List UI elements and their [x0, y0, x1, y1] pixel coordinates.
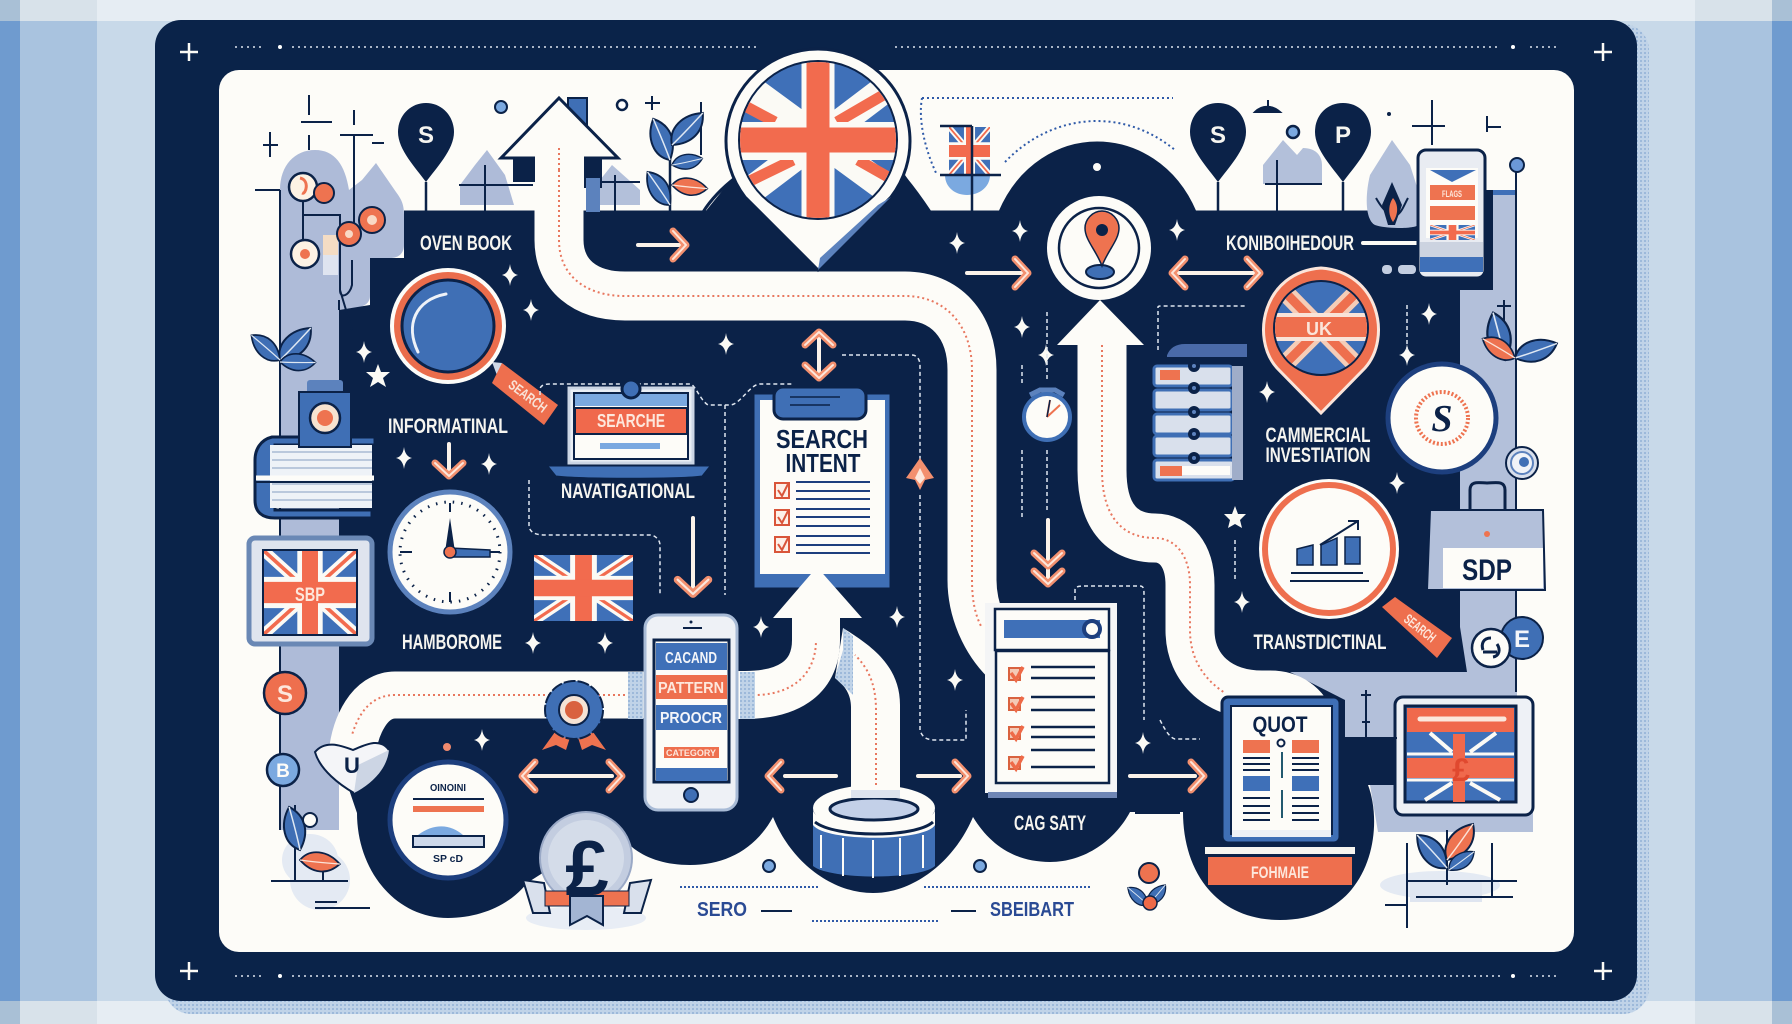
label: commercial investigation: INVESTIATION [1266, 444, 1370, 467]
book with camera [255, 380, 375, 518]
bottom left circle: product: SP cD [433, 854, 463, 865]
arrow: down navigational [678, 518, 708, 594]
UK flag panel left [249, 538, 372, 644]
location icon circle [1047, 196, 1151, 300]
dashed connectors [529, 305, 1407, 740]
route: phone to clipboard [738, 612, 816, 695]
plant bottom left [271, 805, 370, 908]
main clipboard: Search Intent [753, 387, 891, 589]
navy frame card [155, 20, 1637, 1001]
label: case study: CAG SATY [1014, 812, 1086, 835]
plant bottom right [1385, 824, 1517, 928]
label: neighbourhood [1226, 232, 1420, 274]
heading: Search Intent [776, 424, 868, 478]
route: left to heart [352, 695, 645, 755]
shopping bag SDP [1427, 483, 1545, 590]
arrow: towards quote [1130, 762, 1204, 790]
arrow: vertical double [805, 332, 833, 378]
plant left [249, 324, 316, 380]
smartphone: PATTERN [658, 680, 724, 697]
white arrows [435, 231, 1260, 790]
footer small dots [763, 860, 986, 872]
shopping bag SDP: SDP [1462, 554, 1512, 587]
arrow: up small [906, 458, 934, 490]
checklist [775, 482, 870, 553]
arrow head over clipboard [773, 567, 862, 640]
magnifier: transactional: SEARCH [1401, 611, 1439, 645]
route: main route to Search Intent column [559, 150, 1005, 660]
arrow: double from location [1172, 259, 1260, 287]
label: neighbourhood: KONIBOIHEDOUR [1226, 232, 1354, 255]
clipboard clip [774, 387, 866, 419]
dark navy road map region [339, 143, 1493, 920]
coin S: S [277, 681, 293, 708]
heading: Search Intent: INTENT [786, 448, 861, 478]
folder stack [1154, 343, 1248, 480]
quote document: QUOT [1252, 712, 1308, 737]
arrow: double down [1034, 520, 1062, 584]
white inner panel [219, 70, 1574, 952]
map pin S left: S [418, 122, 434, 149]
UK flag middle [534, 555, 633, 621]
top skyline decorations [255, 95, 1501, 225]
label: informational: INFORMATINAL [388, 415, 508, 438]
arrow: towards location [967, 259, 1028, 287]
alarm clock [1024, 390, 1070, 440]
grey side bands [280, 150, 1533, 930]
phone top right: FLAGS [1442, 189, 1462, 199]
map pin P right: P [1335, 122, 1351, 149]
arrow head: location [1057, 300, 1144, 345]
UK pin commercial [1264, 268, 1378, 413]
magnifier: transactional [1259, 479, 1452, 658]
map pin S left [398, 103, 454, 212]
heart badge [315, 743, 389, 793]
cylinder base [813, 785, 935, 878]
label: navigational: NAVATIGATIONAL [561, 480, 695, 503]
grey flame badge [1367, 140, 1418, 228]
arrow: right top left [638, 231, 686, 259]
pound medal: £ [565, 824, 609, 912]
coin small: B [276, 761, 290, 782]
bottom left circle: product [390, 762, 506, 878]
dither on path ends [628, 628, 853, 719]
white route paths [352, 150, 1312, 795]
footer label: SERO: SERO [697, 899, 747, 921]
smartphone [645, 615, 737, 810]
dotted route centre lines [352, 150, 1225, 790]
checklist document [985, 603, 1117, 798]
route: cylinder up [835, 628, 900, 795]
label: commercial investigation [1266, 424, 1371, 467]
arrow head: top left [501, 98, 618, 212]
UK pin commercial: UK [1306, 319, 1332, 339]
S seal circle [1388, 364, 1496, 472]
S seal circle: S [1431, 398, 1453, 440]
smartphone: CATEGORY [666, 748, 716, 758]
coin small [267, 754, 299, 786]
map pin S right [1190, 103, 1246, 212]
label: commercial investigation: CAMMERCIAL [1266, 424, 1371, 447]
laptop icon: SEARCHE [597, 411, 665, 431]
pound medal [523, 812, 651, 925]
coin S [264, 672, 306, 714]
label: open book: OVEN BOOK [420, 232, 512, 255]
plant right [1474, 300, 1558, 373]
footer flower [1126, 863, 1166, 910]
arrow: down informational [435, 444, 463, 476]
laptop icon [548, 380, 710, 478]
large UK flag pin [726, 49, 910, 270]
small globe badge [1506, 447, 1538, 479]
arrow: bottom double left [522, 762, 622, 790]
arrow: bottom left of cylinder [768, 762, 836, 790]
sparkles [356, 219, 1437, 754]
magnifier: informational [390, 268, 558, 425]
flag tablet: £ [1452, 752, 1470, 788]
small dot on route [443, 743, 451, 751]
flag tablet [1340, 690, 1533, 815]
phone top right [1418, 150, 1485, 278]
magnifier: informational: SEARCH [506, 376, 550, 416]
footer label: SBEIBART: SBEIBART [990, 899, 1074, 921]
heart badge: U [344, 753, 360, 778]
bottom left circle: product: OINOINI [430, 783, 466, 794]
small pole flag [921, 98, 1175, 212]
label: homebrome: HAMBOROME [402, 631, 502, 654]
rosette medal [542, 681, 606, 750]
quote document [1222, 697, 1340, 843]
badges: face and E [1472, 617, 1543, 667]
plant top [639, 109, 708, 212]
label: transactional: TRANSTDICTINAL [1254, 631, 1387, 654]
arrow: bottom right of cylinder [918, 762, 968, 790]
badges: face and E: E [1514, 626, 1530, 653]
map pin P right [1315, 103, 1371, 212]
map pin S right: S [1210, 122, 1226, 149]
large clock [390, 492, 510, 612]
white ledge [1135, 812, 1180, 814]
smartphone: PROOCR [660, 710, 722, 727]
heading: Search Intent: SEARCH [776, 424, 868, 454]
form button: FOHMAIE [1251, 863, 1309, 882]
UK flag panel left: SBP [295, 585, 325, 606]
network nodes on left grey band [289, 173, 385, 330]
route: commercial to transactional [1102, 340, 1312, 725]
smartphone: CACAND [665, 650, 717, 667]
form button [1205, 847, 1355, 885]
